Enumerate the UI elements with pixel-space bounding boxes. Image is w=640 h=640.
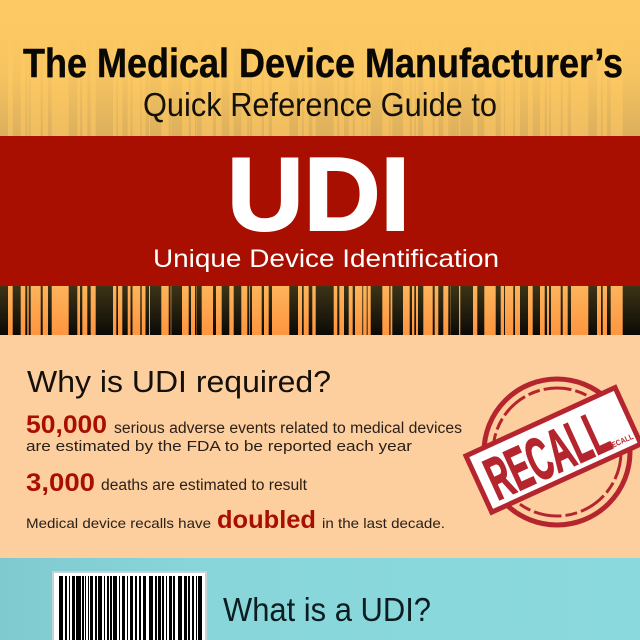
stat: recalls doubled: doubled — [217, 506, 316, 534]
stat: 50,000 events: 50,000 — [26, 411, 107, 439]
heading: why: Why is UDI required? — [27, 364, 331, 399]
stat: recalls doubled: Medical device recalls have — [26, 515, 211, 531]
icon: recall stamp: RECALL — [606, 432, 635, 452]
stat: 50,000 events — [26, 411, 462, 455]
banner subheading: Unique Device Identification — [153, 245, 499, 273]
heading: UDI: UDI — [227, 137, 410, 253]
panel: header background — [0, 0, 640, 137]
heading: what: What is a UDI? — [223, 591, 431, 628]
stat: recalls doubled: in the last decade. — [322, 515, 445, 531]
stat: 3,000 deaths: deaths are estimated to result — [101, 477, 308, 494]
stat: 3,000 deaths — [26, 469, 308, 497]
stat: 50,000 events: serious adverse events related to medical devices — [114, 420, 462, 437]
stat: 3,000 deaths: 3,000 — [26, 469, 95, 497]
stat: recalls doubled — [26, 506, 445, 534]
subtitle: Quick Reference Guide to — [143, 86, 497, 123]
panel: what is a UDI — [0, 558, 640, 640]
stat: 50,000 events: are estimated by the FDA to be reported each year — [26, 439, 412, 455]
panel: why is UDI required — [0, 335, 640, 558]
panel: red banner — [0, 136, 640, 286]
barcode strip — [0, 286, 640, 335]
icon: barcode label — [53, 572, 206, 640]
